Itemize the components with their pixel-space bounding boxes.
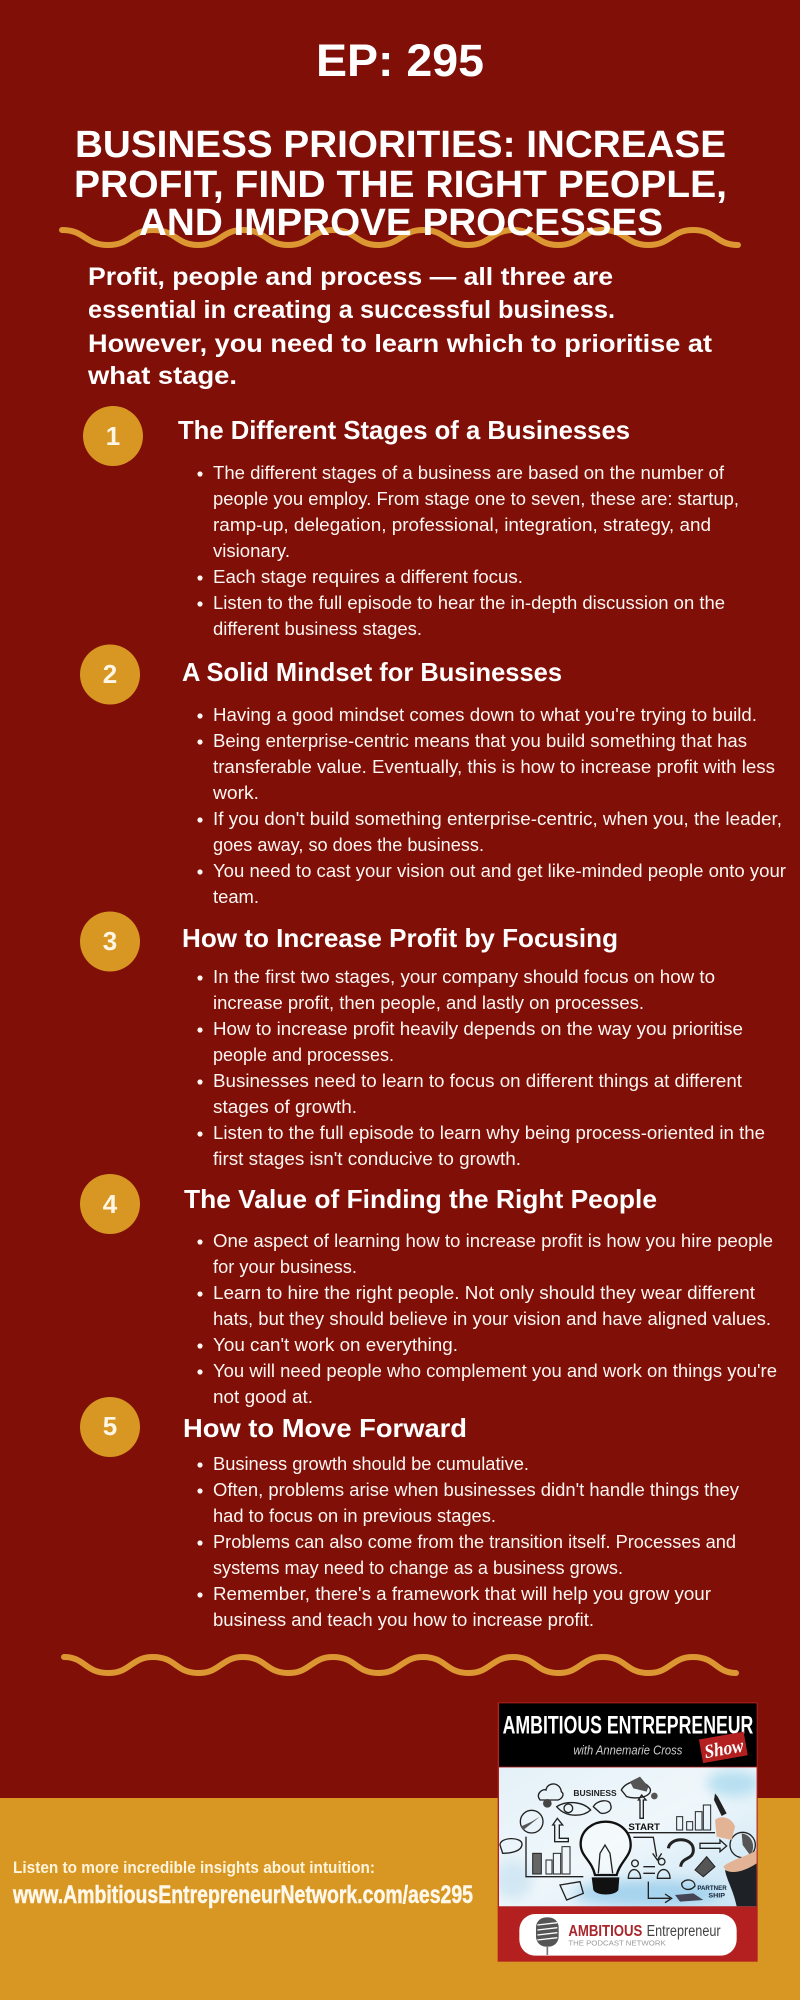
bullets: section 2: You need to cast your vision out and get like-minded people onto your	[213, 861, 786, 881]
doodle: question mark	[668, 1840, 693, 1867]
bullets: section 5: systems may need to change as a business grows.	[213, 1558, 623, 1578]
doodle: puzzle	[560, 1880, 727, 1903]
cover logo pill: Entrepreneur	[647, 1923, 721, 1940]
intro text: what stage.	[87, 362, 237, 390]
bullets: section 4: You will need people who complement you and work on things you're	[213, 1361, 777, 1381]
icon: number 4	[80, 1174, 140, 1234]
icon: number 1: 1	[106, 421, 120, 451]
cover logo pill	[519, 1914, 737, 1956]
doodle: pie chart right	[730, 1832, 755, 1858]
doodle: puzzle: PARTNER	[697, 1885, 727, 1892]
panel: section 2	[80, 644, 786, 907]
icon: number 1	[83, 406, 143, 466]
bullets: section 3: In the first two stages, your company should focus on how to	[213, 967, 715, 987]
doodle: light bulb	[581, 1822, 631, 1894]
bullets: section 5: business and teach you how to increase profit.	[213, 1610, 594, 1630]
episode number: EP: 295	[316, 35, 484, 86]
bullets: section 5: Problems can also come from the transition itself. Processes and	[213, 1532, 736, 1552]
doodle: arrow up	[553, 1818, 568, 1842]
bullets: section 2: transferable value. Eventually, this is how to increase profit with less	[213, 757, 775, 777]
icon: number 5	[80, 1397, 140, 1457]
bullets: section 4: You can't work on everything.	[213, 1335, 458, 1355]
heading: section 1: The Different Stages of a Businesses	[178, 415, 630, 445]
footer text: Listen to more incredible insights about intuition:	[13, 1858, 375, 1877]
doodle: puzzle: SHIP	[708, 1892, 725, 1899]
bullets: section 4: Learn to hire the right people. Not only should they wear different	[213, 1283, 755, 1303]
divider wave: top	[62, 230, 738, 245]
bullets: section 3: Listen to the full episode to learn why being process-oriented in the	[213, 1123, 765, 1143]
title: BUSINESS PRIORITIES: INCREASE	[75, 124, 726, 166]
intro text: Profit, people and process — all three are	[88, 263, 613, 291]
podcast cover	[493, 1702, 760, 1962]
bullets: section 3: How to increase profit heavily depends on the way you prioritise	[213, 1019, 743, 1039]
bullets: section 5: Business growth should be cumulative.	[213, 1454, 529, 1474]
title: PROFIT, FIND THE RIGHT PEOPLE,	[74, 164, 727, 206]
bullets: section 5	[197, 1454, 739, 1630]
bullets: section 3: first stages isn't conducive to growth.	[213, 1149, 521, 1169]
icon: microphone	[536, 1917, 559, 1955]
doodle: cloud	[538, 1784, 563, 1800]
bullets: section 4: hats, but they should believe in your vision and have aligned values.	[213, 1309, 771, 1329]
icon: number 2: 2	[103, 659, 117, 689]
cover header	[499, 1703, 757, 1767]
intro text: However, you need to learn which to prioritise at	[88, 330, 713, 358]
bullets: section 1: The different stages of a business are based on the number of	[213, 463, 725, 483]
doodle: start arrow	[628, 1795, 715, 1860]
bullets: section 2: team.	[213, 887, 259, 907]
footer band	[0, 1798, 800, 2000]
bullets: section 1: people you employ. From stage one to seven, these are: startup,	[213, 489, 739, 509]
bullets: section 2	[197, 705, 786, 907]
icon: number 3: 3	[103, 926, 117, 956]
intro text: essential in creating a successful business.	[88, 296, 615, 324]
footer text: www.AmbitiousEntrepreneurNetwork.com/aes295	[12, 1881, 473, 1909]
bullets: section 2: goes away, so does the business.	[213, 835, 484, 855]
bullets: section 1: different business stages.	[213, 619, 422, 639]
bullets: section 4	[197, 1231, 777, 1407]
bullets: section 1: visionary.	[213, 541, 290, 561]
photo: hand with pen	[714, 1793, 757, 1906]
divider wave: bottom	[64, 1657, 736, 1673]
title	[74, 124, 727, 244]
bullets: section 5: Remember, there's a framework that will help you grow your	[213, 1584, 711, 1604]
icon: number 2	[80, 644, 140, 704]
panel: section 3	[80, 912, 765, 1169]
bullets: section 3: increase profit, then people, and lastly on processes.	[213, 993, 644, 1013]
cover header: with Annemarie Cross	[573, 1743, 683, 1757]
icon: number 5: 5	[103, 1411, 117, 1441]
bullets: section 3: stages of growth.	[213, 1097, 357, 1117]
doodle: arrow boxes	[700, 1840, 727, 1852]
doodle: people exchange	[628, 1858, 670, 1878]
doodle: start arrow: START	[628, 1822, 661, 1832]
footer text	[12, 1858, 473, 1909]
bullets: section 4: One aspect of learning how to increase profit is how you hire people	[213, 1231, 773, 1251]
heading: section 4: The Value of Finding the Right People	[184, 1184, 657, 1214]
doodle: money	[695, 1857, 715, 1877]
doodle: rising bars	[677, 1805, 711, 1830]
bullets: section 3	[197, 967, 765, 1169]
bullets: section 1: ramp-up, delegation, professional, integration, strategy, and	[213, 515, 711, 535]
doodle: speech bubbles	[500, 1839, 522, 1853]
bullets: section 1: Listen to the full episode to hear the in-depth discussion on the	[213, 593, 725, 613]
doodle: rocket	[557, 1801, 611, 1815]
panel: section 1	[83, 406, 739, 639]
panel: section 4	[80, 1174, 777, 1407]
doodle: house on cloud	[621, 1777, 658, 1799]
heading: section 2: A Solid Mindset for Businesses	[182, 657, 562, 687]
doodle: business label: BUSINESS	[573, 1789, 617, 1798]
icon: number 4: 4	[103, 1189, 118, 1219]
panel: section 5	[80, 1397, 739, 1630]
heading: section 3: How to Increase Profit by Focusing	[182, 923, 618, 953]
intro text	[87, 263, 713, 390]
cover logo pill: AMBITIOUS	[568, 1923, 643, 1940]
bullets: section 1	[197, 463, 739, 639]
doodle: bar chart	[526, 1837, 583, 1877]
icon: number 3	[80, 912, 140, 972]
bullets: section 4: not good at.	[213, 1387, 313, 1407]
cover logo pill: THE PODCAST NETWORK	[568, 1939, 666, 1948]
cover illustration	[493, 1767, 760, 1907]
bullets: section 3: people and processes.	[213, 1045, 394, 1065]
bullets: section 2: Being enterprise-centric means that you build something that has	[213, 731, 747, 751]
doodle: pie chart left	[520, 1810, 543, 1833]
bullets: section 4: for your business.	[213, 1257, 357, 1277]
heading: section 5: How to Move Forward	[183, 1413, 467, 1443]
bullets: section 2: If you don't build something enterprise-centric, when you, the leader,	[213, 809, 782, 829]
bullets: section 2: Having a good mindset comes down to what you're trying to build.	[213, 705, 757, 725]
bullets: section 1: Each stage requires a different focus.	[213, 567, 523, 587]
title: AND IMPROVE PROCESSES	[139, 202, 663, 244]
bullets: section 3: Businesses need to learn to focus on different things at different	[213, 1071, 742, 1091]
bullets: section 5: had to focus on in previous stages.	[213, 1506, 496, 1526]
bullets: section 2: work.	[212, 783, 259, 803]
badge: show: Show	[703, 1736, 745, 1763]
bullets: section 5: Often, problems arise when businesses didn't handle things they	[213, 1480, 739, 1500]
